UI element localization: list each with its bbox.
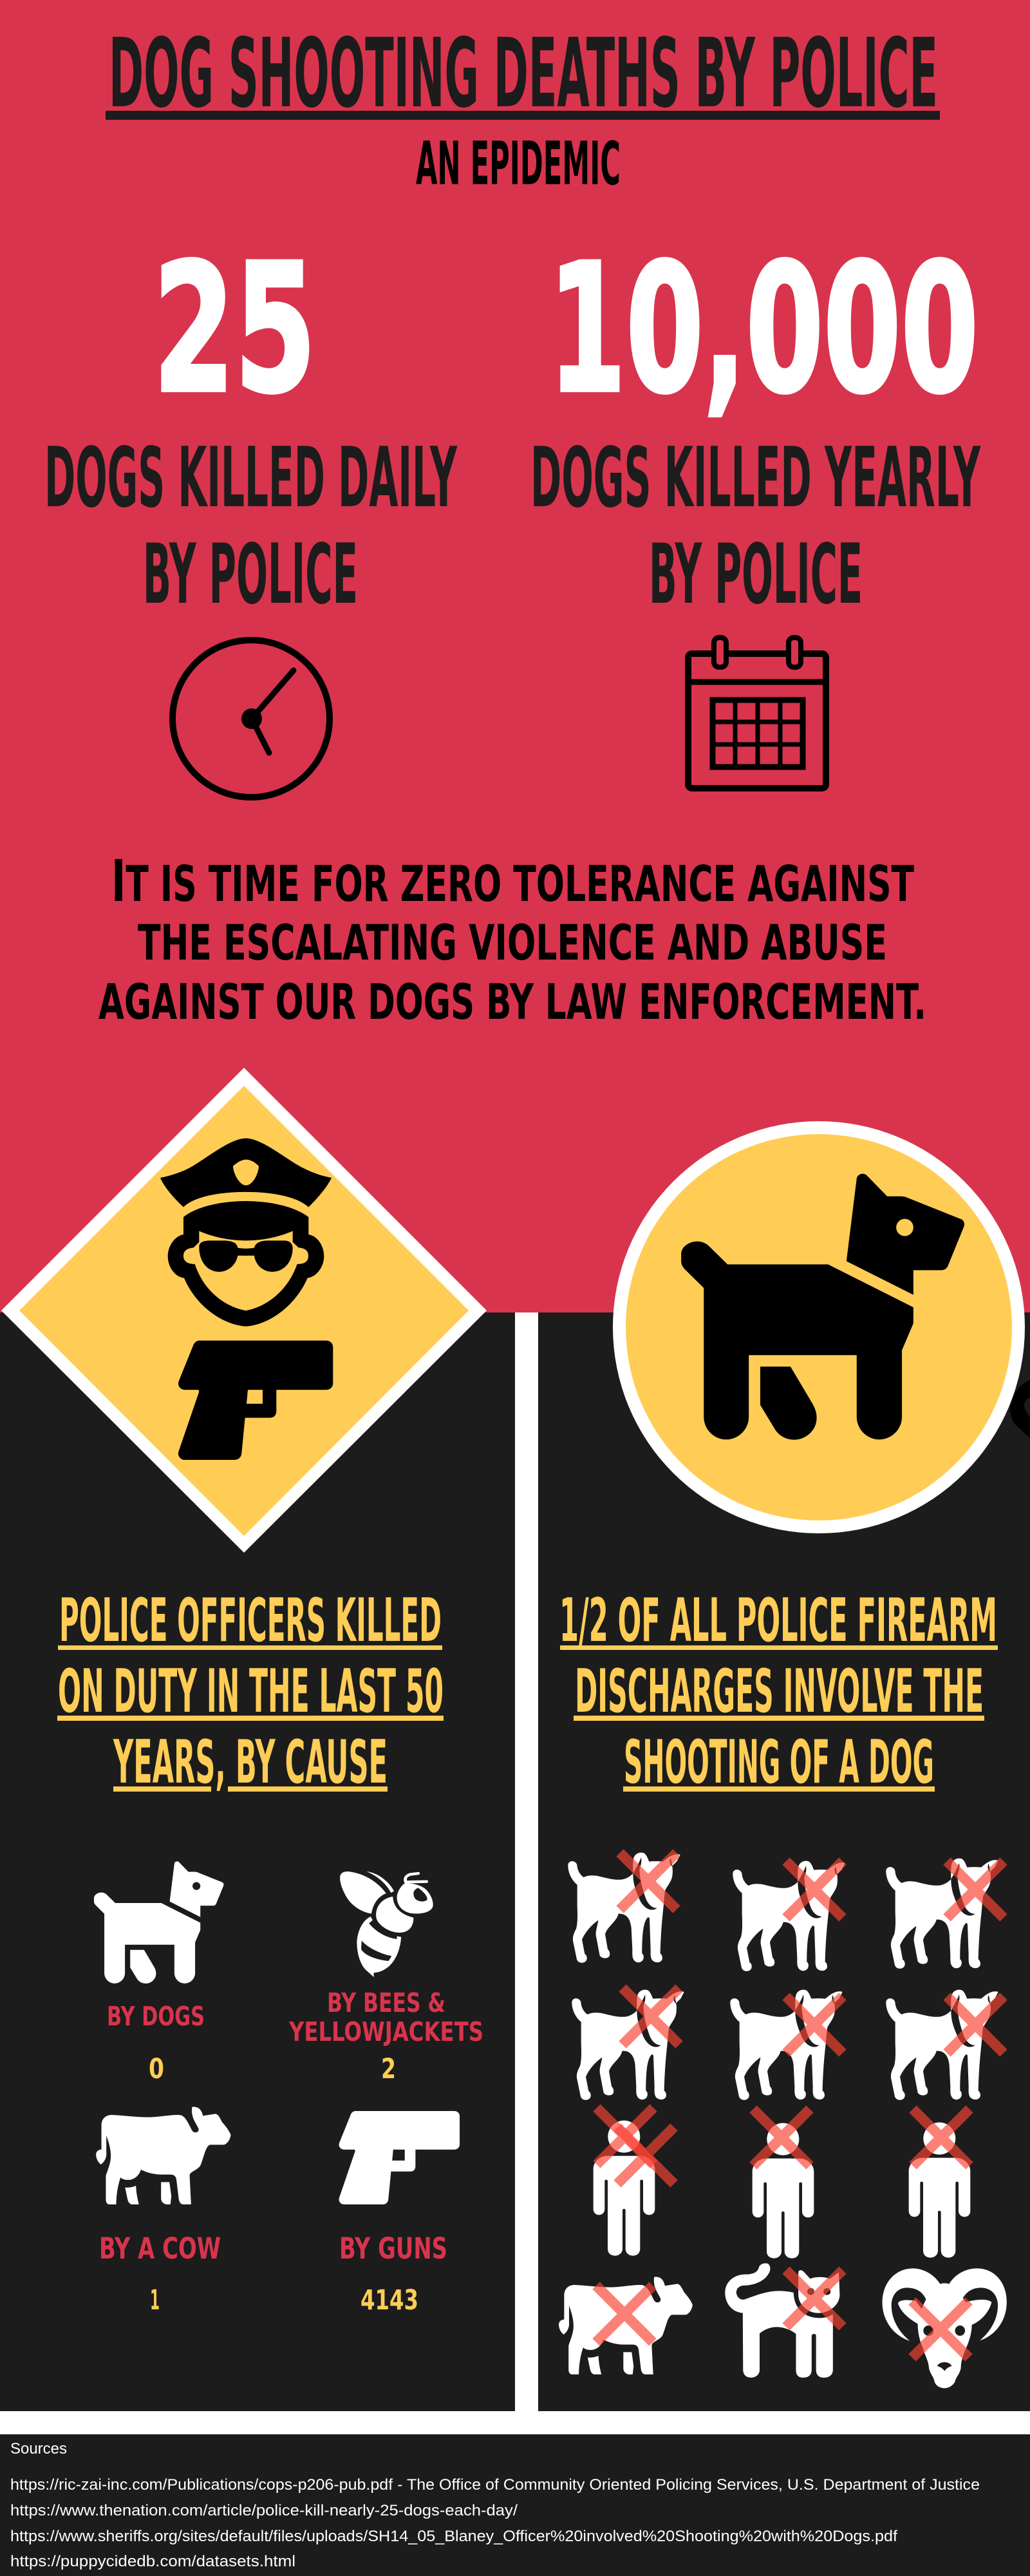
stat: 25 dogs daily bbox=[44, 226, 458, 623]
icon: crossed person 1 bbox=[594, 2108, 674, 2256]
heading: half of firearm discharges bbox=[559, 1586, 998, 1797]
label: by a cow: BY A COW bbox=[99, 2231, 221, 2266]
source list bbox=[10, 2476, 980, 2570]
icon: crossed dog 2 bbox=[733, 1861, 845, 1971]
icon: partial black dog behind circle bbox=[1010, 1380, 1030, 1438]
source list: https://puppycidedb.com/datasets.html bbox=[10, 2553, 295, 2570]
stat number: 25: 25 bbox=[153, 226, 316, 432]
label: by bees and yellowjackets: YELLOWJACKETS bbox=[288, 2016, 483, 2047]
callout: zero tolerance statement bbox=[98, 848, 926, 1030]
stat block: by a cow bbox=[96, 2107, 230, 2316]
icon: pistol bbox=[178, 1341, 333, 1460]
source list: https://www.sheriffs.org/sites/default/files/uploads/SH14_05_Blaney_Officer%20involved%20Shooting%20with%20Dogs.pdf bbox=[10, 2528, 897, 2545]
value: 1: 1 bbox=[150, 2284, 160, 2316]
value: 2: 2 bbox=[381, 2053, 396, 2085]
panel: sources bbox=[0, 2434, 1030, 2576]
pictogram grid: crossed-out targets bbox=[559, 1853, 1007, 2388]
icon: crossed dog 4 bbox=[572, 1988, 684, 2100]
panel: left dark panel bbox=[0, 1312, 515, 2411]
label: by bees and yellowjackets bbox=[288, 1987, 483, 2047]
panel: right dark panel bbox=[538, 1312, 1030, 2411]
label: by guns: BY GUNS bbox=[339, 2231, 447, 2266]
text: DOGS KILLED DAILY bbox=[44, 430, 458, 526]
icon: cow bbox=[96, 2107, 230, 2204]
icon: crossed cow bbox=[559, 2277, 693, 2374]
stat: 10,000 dogs yearly bbox=[530, 226, 981, 623]
icon: calendar bbox=[688, 638, 826, 788]
icon: crossed person 2 bbox=[753, 2109, 814, 2259]
label: by bees and yellowjackets: BY BEES & bbox=[327, 1987, 445, 2018]
stat block: by bees bbox=[288, 1871, 483, 2085]
icon: gun bbox=[339, 2111, 460, 2204]
icon: crossed person 3 bbox=[909, 2109, 970, 2258]
source list: https://www.thenation.com/article/police-kill-nearly-25-dogs-each-day/ bbox=[10, 2502, 518, 2519]
icon: police officer head bbox=[160, 1139, 332, 1327]
icon: clock bbox=[173, 640, 330, 797]
stat block: by guns bbox=[339, 2111, 460, 2316]
source list: https://ric-zai-inc.com/Publications/cops-p206-pub.pdf - The Office of Community Oriented Policing Services, U.S. Department of Justice bbox=[10, 2476, 980, 2494]
icon: dog bbox=[94, 1861, 223, 1984]
divider band bbox=[515, 1312, 538, 2411]
icon: crossed dog 6 bbox=[886, 1990, 1004, 2100]
icon: crossed dog 3 bbox=[886, 1859, 1004, 1969]
panel: red header background bbox=[0, 0, 1030, 1312]
icon: bee bbox=[340, 1871, 433, 1977]
text: POLICE OFFICERS KILLED bbox=[59, 1586, 442, 1655]
heading: police officers killed bbox=[57, 1586, 444, 1797]
icon: crossed dog 1 bbox=[568, 1853, 680, 1963]
icon: crossed ram bbox=[883, 2268, 1007, 2388]
icon: crossed dog 5 bbox=[730, 1990, 843, 2100]
sources heading: Sources bbox=[10, 2440, 67, 2458]
label: by dogs: BY DOGS bbox=[107, 2001, 205, 2032]
icon: dog in yellow circle bbox=[613, 1121, 1025, 1533]
text: ON DUTY IN THE LAST 50 bbox=[58, 1656, 444, 1726]
stat: 25 dogs daily: BY POLICE bbox=[143, 527, 358, 623]
icon: police officer diamond badge bbox=[1, 1068, 487, 1553]
heading: police officers killed: YEARS, BY CAUSE bbox=[113, 1727, 388, 1797]
value: 4143: 4143 bbox=[360, 2284, 418, 2316]
value: 0: 0 bbox=[149, 2053, 164, 2085]
stat block: by dogs bbox=[94, 1861, 223, 2085]
icon: crossed cat bbox=[725, 2263, 843, 2378]
text: AN EPIDEMIC bbox=[416, 129, 621, 198]
